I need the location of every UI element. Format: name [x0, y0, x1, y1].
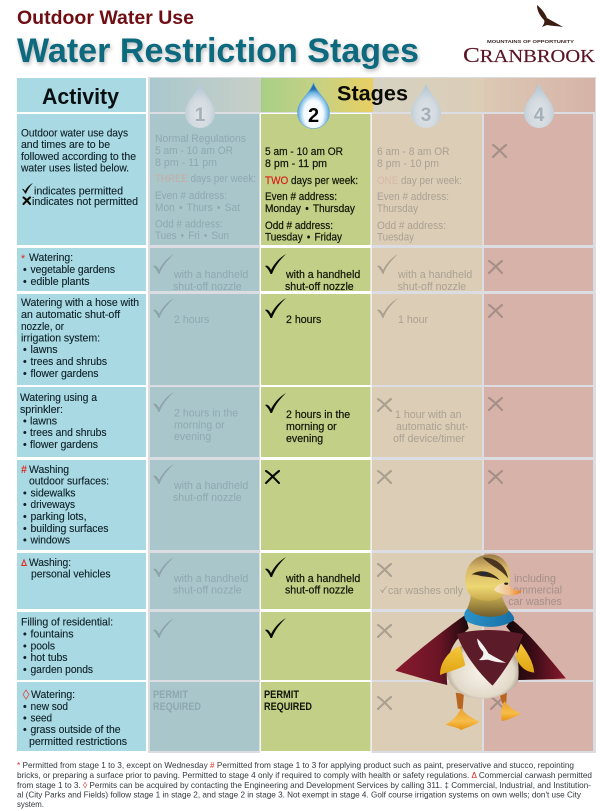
- row: sprinkler: lawns: [30, 416, 57, 428]
- stage 1 schedule: Even # address:: [155, 190, 227, 202]
- heading cell: Activity: Activity: [42, 84, 120, 109]
- wings: [440, 643, 534, 675]
- duck legs and feet: [445, 693, 521, 730]
- row: hose or irrigation: [17, 294, 593, 385]
- footnotes: from stage 1 to 3. ◊ Permits can be acquired by contacting the Engineering and Development Services by calling 311. ‡ Commercial, Industrial, and Institution-: [17, 780, 591, 790]
- row: sprinkler: 2 hours in the: [286, 409, 350, 421]
- row: sprinkler: automatic shut-: [396, 421, 469, 433]
- row: vegetable gardens: Watering:: [29, 252, 73, 264]
- text: instructions: followed according to the: [21, 151, 136, 163]
- row: sprinkler: morning or: [286, 421, 337, 433]
- stage 1 schedule: Tues • Fri • Sun: [155, 230, 229, 242]
- drop 2: 2: [308, 105, 319, 127]
- row: washing outdoor surfaces: driveways: [30, 499, 75, 511]
- head: [465, 554, 522, 601]
- logo wordmark: CRANBROOK: [463, 43, 595, 67]
- row: sprinkler: flower gardens: [30, 439, 98, 451]
- row: filling residential: •: [23, 628, 27, 640]
- row: washing personal vehicles: [17, 553, 593, 609]
- row: washing outdoor surfaces: with a handheld: [173, 480, 248, 492]
- footnotes: system.: [17, 799, 44, 809]
- row: new sod and seed: new sod: [30, 701, 68, 713]
- stage 3 schedule: Odd # address:: [377, 220, 446, 232]
- stage 3 schedule: Even # address:: [377, 191, 449, 203]
- text: instructions: indicates permitted: [34, 186, 123, 198]
- row: new sod and seed: •: [23, 724, 27, 736]
- row: sprinkler: •: [23, 427, 27, 439]
- row: vegetable gardens: shut-off nozzle: [398, 281, 466, 293]
- icon: eagle: [537, 5, 563, 27]
- stage 3 schedule: ONE day per week:: [377, 175, 462, 187]
- water drops with stage numbers: [185, 83, 554, 128]
- row: washing personal vehicles: commercial: [508, 584, 562, 596]
- duck body: [447, 640, 520, 699]
- row: vegetable gardens: with a handheld: [397, 269, 472, 281]
- row: washing personal vehicles: with a handheld: [285, 573, 360, 585]
- grid backdrop: [148, 77, 596, 753]
- footnotes: al (City Parks and Fields) follow stage 1 in stage 2, and stage 2 in stage 3. Not exempt in stage 4. Golf course irrigation systems on own wells; don't use City: [17, 790, 582, 800]
- row: new sod and seed: REQUIRED: [264, 701, 312, 713]
- row: filling residential: •: [23, 640, 27, 652]
- row: vegetable gardens: [17, 248, 593, 293]
- row: washing outdoor surfaces: outdoor surfaces:: [29, 476, 109, 488]
- row: new sod and seed: •: [23, 701, 27, 713]
- stage 1 schedule: 5 am - 10 am OR: [155, 145, 233, 157]
- stage 3 schedule: 8 pm - 10 pm: [377, 158, 439, 170]
- row: vegetable gardens: shut-off nozzle: [285, 281, 354, 293]
- row: new sod and seed: •: [23, 712, 27, 724]
- row: hose or irrigation: irrigation system:: [21, 332, 100, 344]
- drop 1: 1: [195, 105, 206, 126]
- stage 3 schedule: 6 am - 8 am OR: [377, 146, 450, 158]
- row: vegetable gardens: •: [23, 276, 27, 288]
- row: new sod and seed: [17, 682, 593, 751]
- row: sprinkler: sprinkler:: [20, 404, 63, 416]
- stage 2 schedule: 5 am - 10 am OR: [265, 146, 343, 158]
- row: washing personal vehicles: including: [514, 573, 556, 585]
- row: filling residential: •: [23, 652, 27, 664]
- row: new sod and seed: permitted restrictions: [29, 736, 127, 748]
- title: Water Restriction Stages: Water Restriction Stages: [17, 32, 419, 70]
- stage 1 schedule: [155, 133, 256, 242]
- row: hose or irrigation: Watering with a hose with: [21, 297, 139, 309]
- duck mascot with cape: [395, 554, 566, 730]
- row: vegetable gardens: vegetable gardens: [30, 264, 115, 276]
- header band: Stages: Stages: [337, 82, 408, 106]
- row: washing outdoor surfaces: windows: [30, 534, 70, 546]
- stage 3 schedule: [377, 146, 462, 244]
- collar: [464, 608, 514, 627]
- row: new sod and seed: PERMIT: [264, 689, 299, 701]
- drop 3: [411, 83, 441, 128]
- row: sprinkler: [17, 387, 593, 457]
- stage 2 schedule: 8 pm - 11 pm: [265, 158, 327, 170]
- stage 3 schedule: Tuesday: [377, 232, 415, 244]
- row: hose or irrigation: 2 hours: [286, 314, 321, 326]
- stage 2 schedule: Even # address:: [265, 191, 337, 203]
- row: days and times: [17, 114, 593, 245]
- logo: City of Cranbrook: [463, 5, 595, 67]
- stage 2 schedule: Odd # address:: [265, 220, 333, 232]
- row: new sod and seed: seed: [30, 712, 52, 724]
- header band: Stages: [150, 78, 595, 112]
- row: washing personal vehicles: personal vehicles: [31, 568, 110, 580]
- stage 2 schedule: TWO days per week:: [265, 175, 358, 187]
- row: washing outdoor surfaces: [17, 460, 593, 550]
- row: filling residential: [17, 612, 593, 680]
- row: hose or irrigation: nozzle, or: [21, 321, 64, 333]
- row: filling residential: •: [23, 664, 27, 676]
- row: new sod and seed: grass outside of the: [30, 724, 121, 736]
- drop 3: 3: [421, 105, 431, 126]
- row: washing outdoor surfaces: •: [23, 511, 27, 523]
- stage 1 schedule: Odd # address:: [155, 218, 223, 230]
- row: hose or irrigation: 1 hour: [398, 314, 429, 326]
- row: sprinkler: morning or: [174, 420, 225, 432]
- stage 1 schedule: Normal Regulations: [155, 133, 246, 145]
- row: washing personal vehicles: Washing:: [29, 557, 71, 569]
- row: washing outdoor surfaces: •: [23, 488, 27, 500]
- stage 1 schedule: 8 pm - 11 pm: [155, 157, 217, 169]
- row: vegetable gardens: •: [23, 264, 27, 276]
- subtitle: Outdoor Water Use: Outdoor Water Use: [17, 8, 194, 29]
- stage 3 schedule: Thursday: [377, 203, 419, 215]
- logo tagline: MOUNTAINS OF OPPORTUNITY: [487, 39, 575, 45]
- row: vegetable gardens: shut-off nozzle: [173, 281, 242, 293]
- row: hose or irrigation: •: [23, 344, 27, 356]
- row: washing outdoor surfaces: •: [23, 523, 27, 535]
- row: new sod and seed: REQUIRED: [153, 701, 201, 713]
- footnotes: * Permitted from stage 1 to 3, except on Wednesday # Permitted from stage 1 to 3 for applying product such as paint, preservative and stucco, repointing: [17, 760, 574, 770]
- row: washing outdoor surfaces: Washing: [29, 464, 69, 476]
- row: hose or irrigation: lawns: [30, 344, 58, 356]
- stage 2 schedule: Tuesday • Friday: [265, 232, 343, 244]
- text: instructions: [20, 128, 138, 208]
- row: filling residential: fountains: [30, 628, 74, 640]
- row: washing outdoor surfaces: building surfaces: [30, 523, 108, 535]
- row: filling residential: Filling of residential:: [21, 616, 113, 628]
- row: filling residential: pools: [30, 640, 55, 652]
- row: hose or irrigation: flower gardens: [30, 368, 98, 380]
- row: sprinkler: trees and shrubs: [30, 427, 106, 439]
- heading cell: Activity: [17, 78, 146, 112]
- row: sprinkler: 2 hours in the: [174, 408, 238, 420]
- text: instructions: indicates not permitted: [32, 196, 138, 208]
- row: vegetable gardens: with a handheld: [285, 269, 360, 281]
- row: hose or irrigation: trees and shrubs: [30, 356, 107, 368]
- row: washing outdoor surfaces: shut-off nozzle: [173, 492, 242, 504]
- row: washing personal vehicles: with a handheld: [173, 573, 248, 585]
- row: hose or irrigation: an automatic shut-off: [21, 309, 120, 321]
- row: washing outdoor surfaces: parking lots,: [30, 511, 86, 523]
- footnotes: [17, 760, 592, 809]
- row: washing outdoor surfaces: sidewalks: [30, 488, 76, 500]
- row: sprinkler: evening: [286, 433, 323, 445]
- row: hose or irrigation: 2 hours: [174, 314, 209, 326]
- row: sprinkler: 1 hour with an: [395, 409, 462, 421]
- neck: [465, 590, 511, 619]
- drop 2: [298, 83, 330, 128]
- row: vegetable gardens: *: [21, 253, 25, 265]
- row: hose or irrigation: •: [23, 368, 27, 380]
- cape: [395, 615, 566, 685]
- row: new sod and seed: Watering:: [31, 689, 75, 701]
- stage 2 schedule: Monday • Thursday: [265, 203, 356, 215]
- row: washing personal vehicles: shut-off nozzle: [173, 584, 242, 596]
- row: washing outdoor surfaces: #: [21, 464, 27, 476]
- stage 4 cross: [493, 145, 506, 157]
- row: washing personal vehicles: shut-off nozzle: [285, 584, 354, 596]
- drop 1: [185, 83, 215, 128]
- text: instructions: and times are to be: [21, 139, 110, 151]
- chest shield with eagle: [457, 630, 523, 686]
- drop 4: 4: [534, 105, 545, 126]
- row: sprinkler: evening: [174, 431, 211, 443]
- text: instructions: Outdoor water use days: [21, 128, 128, 140]
- row: vegetable gardens: edible plants: [30, 276, 90, 288]
- stage 2 schedule: [265, 146, 358, 244]
- drop 4: [524, 83, 554, 128]
- stage 1 schedule: THREE days per week:: [155, 173, 256, 185]
- row: sprinkler: Watering using a: [20, 392, 97, 404]
- row: new sod and seed: PERMIT: [153, 689, 188, 701]
- row: filling residential: hot tubs: [30, 652, 68, 664]
- row: washing outdoor surfaces: •: [23, 499, 27, 511]
- stage 1 schedule: Mon • Thurs • Sat: [155, 202, 240, 214]
- row: sprinkler: •: [23, 416, 27, 428]
- row: vegetable gardens: with a handheld: [173, 269, 248, 281]
- row: hose or irrigation: •: [23, 356, 27, 368]
- row: washing personal vehicles: car washes: [508, 596, 562, 608]
- row: sprinkler: off device/timer: [393, 433, 465, 445]
- row: filling residential: garden ponds: [30, 664, 93, 676]
- row: sprinkler: •: [23, 439, 27, 451]
- row: washing outdoor surfaces: •: [23, 534, 27, 546]
- text: instructions: water uses listed below.: [20, 162, 129, 174]
- footnotes: bricks, or preparing a surface prior to paving. Permitted to stage 4 only if required to comply with health or safety regulations. Δ Commercial carwash permitted: [17, 770, 592, 780]
- row: washing personal vehicles: car washes only: [388, 585, 464, 597]
